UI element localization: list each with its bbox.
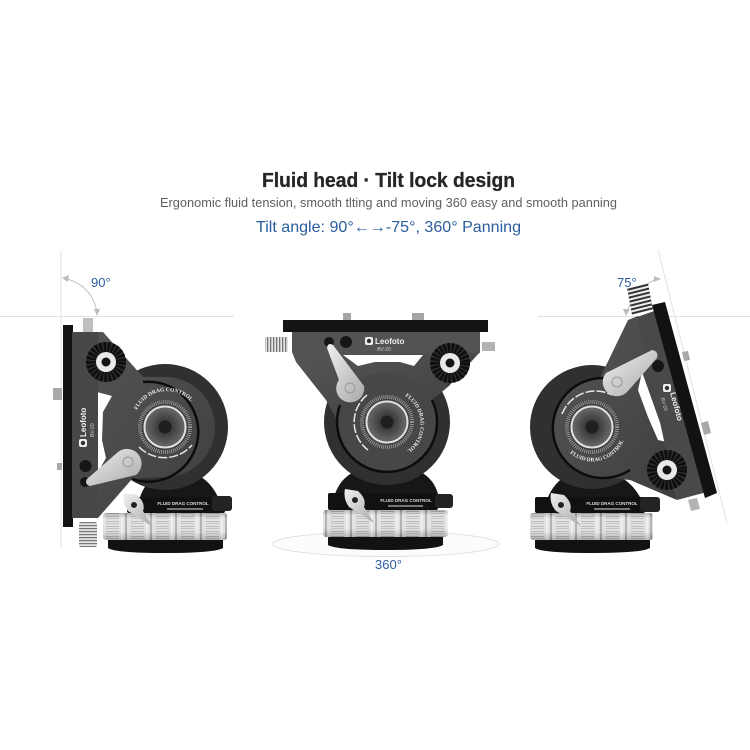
- lens: [138, 400, 192, 454]
- arrow: 90 degree arc: [62, 275, 100, 316]
- base: [530, 470, 660, 553]
- plate window: [638, 372, 667, 442]
- logo icon: [79, 439, 87, 447]
- side pins: [682, 351, 711, 435]
- plate window: [343, 355, 423, 366]
- right angle guides: [538, 250, 750, 523]
- tilt angle line: Tilt angle: 90°←→-75°, 360° Panning: [256, 219, 521, 236]
- arm: [72, 332, 215, 518]
- logo: Leofoto: [668, 391, 684, 422]
- model: BV-20: [90, 423, 96, 437]
- tilt disc: [324, 359, 450, 485]
- disc groove: [553, 378, 630, 478]
- rosette knob: [647, 450, 687, 490]
- bottom pin: [688, 498, 700, 511]
- top knurled knob: [627, 283, 653, 315]
- model: BV-20: [377, 347, 391, 353]
- rosette knob: [86, 342, 126, 382]
- arm: [554, 316, 677, 500]
- base: FLUID DRAG CONTROL: [157, 501, 209, 506]
- drag label: [405, 396, 421, 452]
- top pins: [343, 313, 424, 321]
- disc groove: [132, 382, 198, 482]
- base: [103, 470, 232, 553]
- label: 360 degrees: 360°: [375, 557, 402, 572]
- bottom knurled knob: [79, 522, 97, 547]
- arrow: 75 degree arc: [623, 276, 661, 316]
- base lever: [344, 489, 374, 523]
- lock lever: [86, 449, 142, 486]
- tilt disc: [102, 364, 228, 490]
- label: 90 degrees: 90°: [91, 275, 111, 290]
- scale arc: [562, 391, 612, 414]
- logo: Leofoto: [79, 408, 88, 437]
- scale arc: [354, 395, 368, 450]
- top pin: [83, 318, 93, 333]
- clamp plate: [637, 310, 707, 500]
- clamp plate: [283, 320, 488, 332]
- plate window: [97, 392, 112, 472]
- lock lever: [327, 344, 364, 402]
- base: FLUID DRAG CONTROL: [380, 498, 432, 503]
- side pins: [53, 388, 62, 470]
- product: head level front view: FLUID DRAG CONTROL: [405, 393, 424, 452]
- base: [323, 465, 453, 550]
- left angle guides: [0, 250, 234, 548]
- label: 75 degrees: 75°: [617, 275, 637, 290]
- logo: Leofoto: [375, 337, 404, 346]
- logo icon: [663, 384, 671, 392]
- tilt disc: [530, 365, 654, 489]
- product: head level front view: [265, 313, 500, 557]
- logo icon: [365, 337, 373, 345]
- lens: [360, 395, 414, 449]
- scale arc: [139, 445, 192, 458]
- lock lever: [603, 350, 657, 396]
- subtitle: Ergonomic fluid tension, smooth tlting and moving 360 easy and smooth panning: [160, 195, 617, 210]
- product: head tilted 90 degrees: [53, 318, 232, 553]
- drag label: [137, 391, 195, 410]
- lens: [565, 400, 619, 454]
- product: head tilted 75 degrees: FLUID DRAG CONTROL: [570, 440, 624, 462]
- disc groove: [337, 400, 437, 472]
- drag label: [570, 440, 624, 461]
- side knurled knob: [265, 337, 288, 352]
- panning ellipse: [273, 532, 499, 556]
- side pin: [482, 342, 495, 351]
- product: head tilted 90 degrees: FLUID DRAG CONTROL: [134, 388, 192, 410]
- base: FLUID DRAG CONTROL: [586, 501, 638, 506]
- arm: [292, 352, 480, 422]
- product: head tilted 75 degrees: [530, 283, 717, 553]
- base lever: [551, 493, 581, 526]
- clamp plate: [63, 325, 73, 527]
- title: Fluid head · Tilt lock design: [262, 170, 515, 192]
- model: BV-20: [659, 397, 668, 412]
- rosette knob: [430, 343, 470, 383]
- base lever: [124, 493, 153, 527]
